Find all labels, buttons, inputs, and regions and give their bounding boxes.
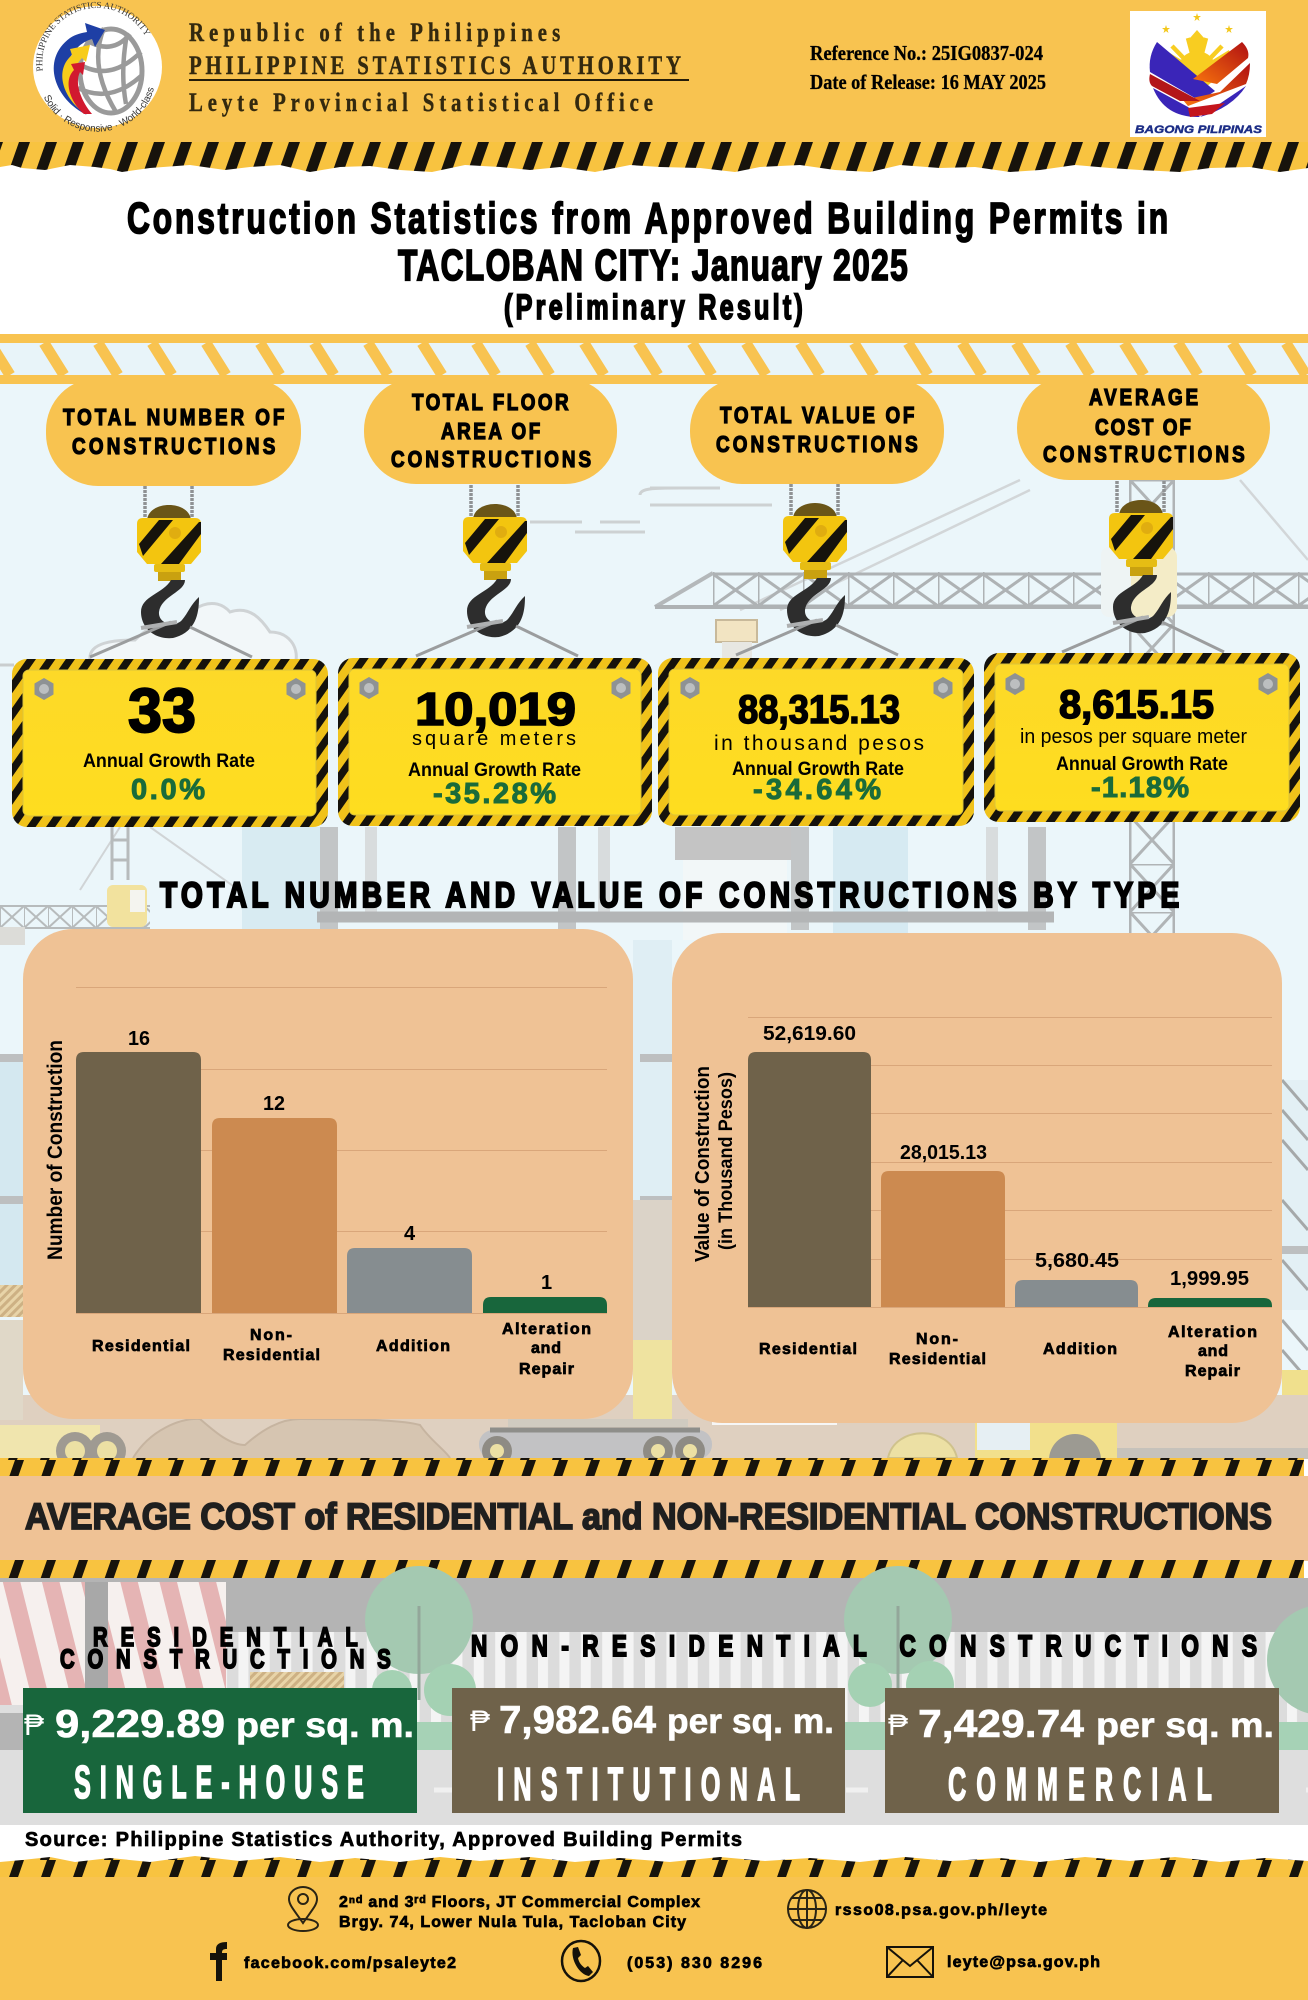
label pill — [1017, 376, 1270, 480]
category labels: and — [1198, 1343, 1228, 1360]
category labels: Addition — [376, 1338, 450, 1355]
hazard sign: 0.0% — [131, 774, 205, 806]
header band — [0, 0, 1308, 142]
bar: non-residential 28,015.13 — [881, 1142, 1005, 1307]
card: single-house: per sq. m. — [236, 1706, 414, 1745]
icon: phone — [562, 1941, 600, 1981]
Bagong Pilipinas logo — [1130, 11, 1266, 137]
faded street scene — [0, 1566, 1308, 1825]
bar: residential 16: 16 — [128, 1028, 150, 1050]
card: commercial: ₱ — [888, 1709, 908, 1742]
residential constructions heading: CONSTRUCTIONS — [60, 1644, 391, 1675]
main title — [127, 194, 1168, 327]
card: institutional: 7,982.64 — [499, 1699, 656, 1742]
bar chart: value of constructions — [672, 933, 1282, 1423]
icon: location pin — [288, 1887, 318, 1931]
label pill: AVERAGE — [1089, 385, 1198, 410]
bar: alteration and repair 1: 1 — [541, 1272, 552, 1294]
bar: residential 52,619.60 — [748, 1023, 871, 1307]
faded construction scene background — [0, 384, 1308, 1486]
address text — [339, 1894, 700, 1931]
category labels: Residential — [92, 1338, 190, 1355]
agency text: Leyte Provincial Statistical Office — [189, 89, 653, 118]
residential constructions heading — [60, 1622, 391, 1675]
PSA logo: Solid · Responsive · World-class — [44, 88, 154, 132]
label pill: TOTAL FLOOR — [412, 390, 569, 415]
hazard sign: Annual Growth Rate — [83, 751, 255, 772]
panel: total value of constructions — [658, 378, 974, 826]
hazard sign: in thousand pesos — [714, 732, 924, 755]
facebook handle: facebook.com/psaleyte2 — [244, 1955, 456, 1972]
axis titles: (in Thousand Pesos) — [716, 1072, 737, 1250]
reference and release date: Reference No.: 25IG0837-024 — [810, 41, 1043, 65]
hazard tapes and average cost banner — [0, 1458, 1308, 1578]
hazard sign — [984, 653, 1300, 822]
main title: TACLOBAN CITY: January 2025 — [398, 241, 908, 290]
category labels: Non- — [250, 1327, 292, 1344]
hazard sign: 88,315.13 — [738, 688, 900, 732]
hazard sign — [658, 658, 974, 826]
bar: alteration and repair 1,999.95 — [1148, 1268, 1272, 1307]
label pill: COST OF — [1095, 415, 1191, 440]
email: leyte@psa.gov.ph — [947, 1954, 1100, 1971]
agency text — [189, 19, 689, 118]
hazard sign: 10,019 — [415, 683, 576, 735]
label pill: CONSTRUCTIONS — [391, 447, 591, 472]
category labels: Repair — [519, 1361, 574, 1378]
category labels: Alteration — [502, 1321, 591, 1338]
agency text: Republic of the Philippines — [189, 19, 560, 48]
category labels — [759, 1324, 1257, 1380]
category labels: Residential — [223, 1347, 320, 1364]
bar: alteration and repair 1 — [483, 1272, 607, 1313]
card: commercial: COMMERCIAL — [948, 1758, 1212, 1810]
website: rsso08.psa.gov.ph/leyte — [835, 1902, 1047, 1919]
hazard sign: -34.64% — [753, 774, 881, 806]
card: commercial: per sq. m. — [1096, 1706, 1274, 1745]
icon: facebook f — [210, 1942, 227, 1981]
main title: (Preliminary Result) — [504, 288, 803, 327]
bar: non-residential 12 — [212, 1093, 337, 1313]
hazard sign: 8,615.15 — [1059, 683, 1214, 727]
label pill: CONSTRUCTIONS — [1043, 442, 1245, 467]
main title: Construction Statistics from Approved Building Permits in — [127, 194, 1168, 243]
category labels: Addition — [1043, 1341, 1117, 1358]
category labels: Alteration — [1168, 1324, 1257, 1341]
card: commercial — [885, 1688, 1279, 1813]
category labels: Non- — [916, 1331, 958, 1348]
card: institutional: ₱ — [470, 1705, 490, 1738]
residential constructions heading: RESIDENTIAL — [93, 1622, 358, 1653]
bar: addition 5,680.45 — [1015, 1250, 1138, 1307]
card: institutional: per sq. m. — [667, 1702, 834, 1741]
label pill: TOTAL VALUE OF — [720, 403, 914, 428]
axis title: Number of Construction — [44, 1040, 67, 1260]
label pill — [46, 378, 301, 486]
category labels: and — [531, 1340, 561, 1357]
address text: Brgy. 74, Lower Nula Tula, Tacloban City — [339, 1914, 686, 1931]
hazard sign: Annual Growth Rate — [1056, 754, 1228, 775]
icon: globe — [788, 1890, 826, 1928]
bar: non-residential 28,015.13: 28,015.13 — [900, 1142, 987, 1164]
Bagong Pilipinas logo: BAGONG PILIPINAS — [1135, 124, 1263, 136]
label pill: CONSTRUCTIONS — [72, 434, 275, 459]
phone number: (053) 830 8296 — [627, 1955, 762, 1972]
card: commercial: 7,429.74 — [918, 1703, 1084, 1746]
bar: residential 16 — [76, 1028, 201, 1313]
hazard sign — [12, 659, 328, 827]
bar: addition 5,680.45: 5,680.45 — [1035, 1250, 1119, 1272]
hazard sign: Annual Growth Rate — [732, 759, 904, 780]
hazard sign — [338, 658, 652, 826]
hazard tape: header bottom — [0, 142, 1308, 178]
non-residential constructions heading: NON-RESIDENTIAL CONSTRUCTIONS — [471, 1629, 1257, 1663]
hazard sign: -1.18% — [1091, 772, 1189, 804]
PSA logo: PHILIPPINE STATISTICS AUTHORITY — [36, 2, 151, 72]
source note: Source: Philippine Statistics Authority, Approved Building Permits — [25, 1829, 742, 1851]
label pill — [364, 378, 617, 484]
bar: addition 4 — [347, 1223, 472, 1313]
bar: addition 4: 4 — [404, 1223, 416, 1245]
reference and release date: Date of Release: 16 MAY 2025 — [810, 70, 1046, 94]
source note — [0, 1825, 1308, 1861]
category labels: Residential — [759, 1341, 857, 1358]
label pill: AREA OF — [441, 419, 540, 444]
card: single-house: SINGLE-HOUSE — [74, 1756, 364, 1808]
bar: non-residential 12: 12 — [263, 1093, 285, 1115]
label pill — [690, 378, 944, 484]
hazard sign: in pesos per square meter — [1020, 726, 1247, 748]
footer band — [0, 1850, 1308, 2000]
striped scaffold beam — [0, 334, 1308, 384]
hazard sign: Annual Growth Rate — [408, 760, 581, 781]
category labels: Residential — [889, 1351, 986, 1368]
axis titles: Value of Construction — [692, 1066, 714, 1262]
bar: alteration and repair 1,999.95: 1,999.95 — [1170, 1268, 1249, 1290]
panel: total floor area of constructions — [338, 378, 652, 826]
card: institutional — [452, 1688, 845, 1813]
section heading: number and value by type: TOTAL NUMBER AND VALUE OF CONSTRUCTIONS BY TYPE — [160, 875, 1179, 915]
category labels — [92, 1321, 591, 1378]
axis titles — [692, 1066, 737, 1262]
hazard sign: -35.28% — [433, 778, 556, 810]
bar chart: number of constructions — [23, 929, 633, 1419]
icon: envelope — [887, 1947, 933, 1977]
label pill: TOTAL NUMBER OF — [63, 405, 285, 430]
agency text: PHILIPPINE STATISTICS AUTHORITY — [189, 52, 681, 81]
card: institutional: INSTITUTIONAL — [497, 1758, 800, 1810]
PSA logo — [33, 2, 162, 132]
panel: total number of constructions — [12, 378, 328, 827]
crane hooks — [90, 481, 1224, 657]
bar: residential 52,619.60: 52,619.60 — [763, 1023, 856, 1045]
card: single-house: ₱ — [24, 1709, 44, 1742]
address text: 2ⁿᵈ and 3ʳᵈ Floors, JT Commercial Complex — [339, 1894, 700, 1911]
hazard sign: square meters — [412, 728, 576, 750]
label pill: CONSTRUCTIONS — [716, 432, 918, 457]
card: single-house: 9,229.89 — [55, 1703, 225, 1746]
reference and release date — [810, 41, 1046, 94]
hazard sign: 33 — [128, 677, 196, 746]
category labels: Repair — [1185, 1363, 1240, 1380]
card: single-house — [23, 1688, 417, 1813]
panel: average cost of constructions — [984, 376, 1300, 822]
